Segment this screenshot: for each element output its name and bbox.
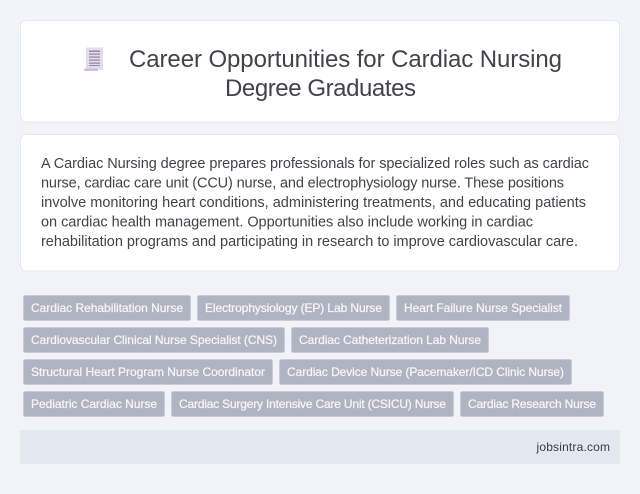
text block: description paragraph: A Cardiac Nursing degree prepares professionals for specialized roles such as cardiac bbox=[41, 156, 589, 172]
tag bbox=[198, 296, 390, 320]
tag bbox=[292, 328, 488, 352]
tag: Cardiac Research Nurse bbox=[468, 397, 596, 411]
title bbox=[129, 46, 562, 102]
tag bbox=[24, 360, 272, 384]
panel: description bbox=[20, 134, 620, 271]
icon: document scroll bbox=[84, 48, 103, 71]
tag: Structural Heart Program Nurse Coordinator bbox=[31, 365, 265, 379]
title: Degree Graduates bbox=[225, 75, 416, 102]
tag bbox=[24, 296, 190, 320]
text block: description paragraph: involve monitoring heart conditions, administering treatments, and educating patients bbox=[41, 195, 586, 211]
tag: Cardiac Surgery Intensive Care Unit (CSICU) Nurse bbox=[179, 397, 446, 411]
tag bbox=[172, 392, 454, 416]
tag: Electrophysiology (EP) Lab Nurse bbox=[205, 301, 382, 315]
text block: description paragraph: rehabilitation programs and participating in research to improve cardiovascular care. bbox=[41, 234, 578, 250]
tag: Cardiovascular Clinical Nurse Specialist (CNS) bbox=[31, 333, 277, 347]
tag bbox=[24, 392, 164, 416]
tag bbox=[24, 328, 284, 352]
footer bbox=[20, 430, 620, 464]
tag: Cardiac Rehabilitation Nurse bbox=[31, 301, 183, 315]
tag bbox=[396, 296, 570, 320]
text block: description paragraph bbox=[41, 156, 589, 250]
tag bbox=[460, 392, 604, 416]
tags: career roles bbox=[24, 296, 604, 416]
panel: header bbox=[20, 20, 620, 122]
text block: description paragraph: on cardiac health management. Opportunities also include working in cardiac bbox=[41, 214, 533, 230]
tag: Cardiac Catheterization Lab Nurse bbox=[299, 333, 481, 347]
text block: description paragraph: nurse, cardiac care unit (CCU) nurse, and electrophysiology nurse. These positions bbox=[41, 176, 564, 192]
tag: Cardiac Device Nurse (Pacemaker/ICD Clinic Nurse) bbox=[287, 365, 564, 379]
footer source text: jobsintra.com bbox=[536, 440, 610, 454]
tag bbox=[280, 360, 572, 384]
tag: Heart Failure Nurse Specialist bbox=[404, 301, 563, 315]
tag: Pediatric Cardiac Nurse bbox=[31, 397, 157, 411]
title: Career Opportunities for Cardiac Nursing bbox=[129, 46, 562, 73]
